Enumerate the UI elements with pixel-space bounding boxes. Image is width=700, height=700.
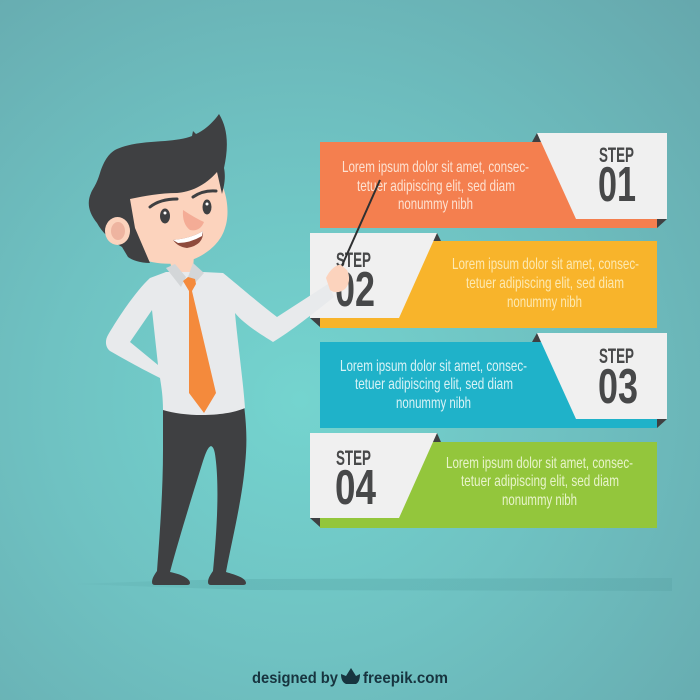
footer credit: designed by bbox=[252, 670, 338, 687]
label: step 1: STEP bbox=[599, 144, 634, 167]
label: step 3: 03 bbox=[598, 360, 638, 414]
mouth bbox=[173, 231, 203, 248]
hair bbox=[89, 114, 227, 263]
legs and shoes bbox=[152, 405, 246, 585]
floor shadow bbox=[75, 578, 672, 591]
text: step 4 body: tetuer adipiscing elit, sed diam bbox=[461, 473, 619, 490]
label: step 1: 01 bbox=[598, 158, 636, 212]
pointer stick bbox=[340, 180, 380, 270]
label: step 3: STEP bbox=[599, 345, 634, 368]
label: step 4: 04 bbox=[335, 461, 376, 515]
label: step 1 bbox=[598, 144, 636, 212]
eyes bbox=[160, 200, 212, 224]
text: step 1 body: tetuer adipiscing elit, sed diam bbox=[357, 178, 515, 195]
text: step 4 body: nonummy nibh bbox=[502, 492, 577, 509]
text: step 2 body: nonummy nibh bbox=[507, 294, 582, 311]
text: step 1 body: Lorem ipsum dolor sit amet, consec- bbox=[342, 159, 529, 176]
text: step 4 body: Lorem ipsum dolor sit amet, consec- bbox=[446, 455, 633, 472]
text: step 3 body: nonummy nibh bbox=[396, 395, 471, 412]
neck bbox=[169, 255, 194, 284]
label: step 2 bbox=[335, 249, 375, 317]
text: step 1 body bbox=[342, 159, 529, 213]
label: step 2: 02 bbox=[335, 263, 375, 317]
footer credit: freepik.com bbox=[363, 670, 448, 687]
nose bbox=[183, 210, 204, 230]
text: step 3 body: tetuer adipiscing elit, sed diam bbox=[355, 376, 513, 393]
panel: step 3 bbox=[320, 333, 667, 428]
tie bbox=[183, 277, 216, 413]
text: step 3 body bbox=[340, 358, 527, 412]
character: businessman bbox=[89, 114, 380, 585]
footer credit bbox=[252, 668, 448, 687]
label: step 3 bbox=[598, 345, 638, 414]
panel: step 1 bbox=[320, 133, 667, 228]
text: step 2 body: tetuer adipiscing elit, sed diam bbox=[466, 275, 624, 292]
eyebrows bbox=[150, 191, 216, 207]
panel: step 4 bbox=[310, 433, 657, 528]
label: step 2: STEP bbox=[336, 249, 371, 272]
label: step 4 bbox=[335, 447, 376, 515]
text: step 1 body: nonummy nibh bbox=[398, 196, 473, 213]
hand bbox=[326, 265, 349, 292]
icon: freepik crown bbox=[341, 668, 360, 684]
text: step 4 body bbox=[446, 455, 633, 509]
panel: step 2 bbox=[310, 233, 657, 328]
text: step 3 body: Lorem ipsum dolor sit amet, consec- bbox=[340, 358, 527, 375]
collar bbox=[166, 263, 204, 287]
label: step 4: STEP bbox=[336, 447, 371, 470]
ear bbox=[105, 217, 130, 245]
face bbox=[125, 170, 228, 264]
text: step 2 body bbox=[452, 256, 639, 311]
shirt bbox=[106, 272, 334, 415]
